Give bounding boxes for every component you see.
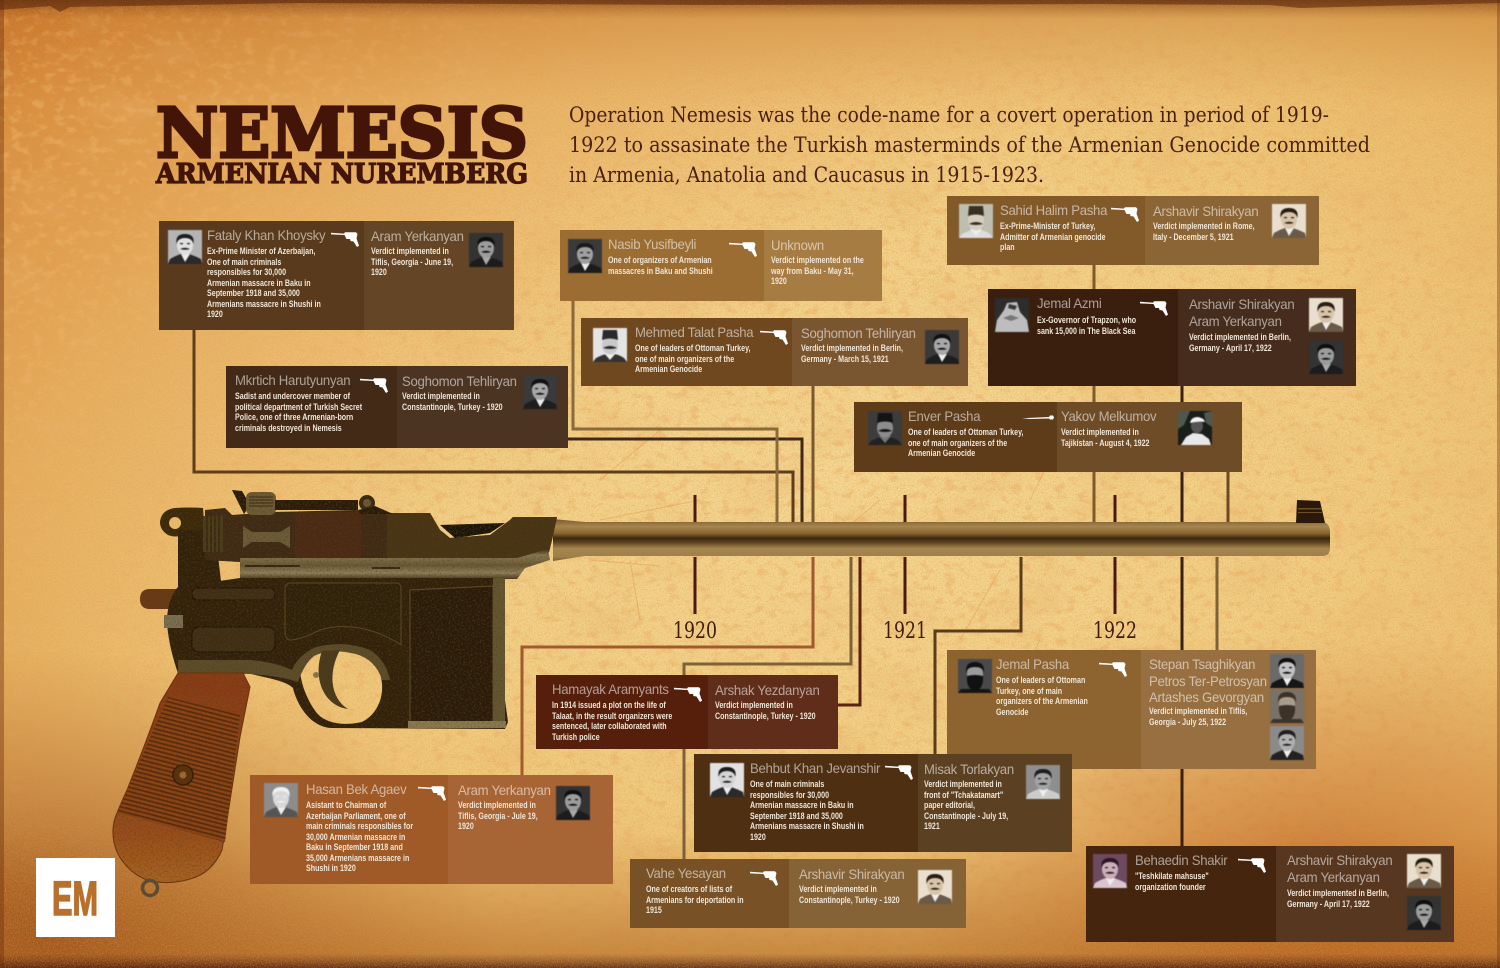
avenger name: Aram Yerkanyan [371,228,464,244]
name: Jemal Azmi [1037,295,1101,311]
description: organization founder [1135,882,1206,892]
verdict: paper editorial, [924,800,975,810]
description: Armenians for deportation in [646,894,744,904]
verdict: Verdict implemented in [1061,427,1139,437]
icon: pistol [1238,858,1266,873]
description: organizers of the Armenian [996,696,1088,706]
icon: pistol [1099,662,1127,677]
icon: pistol [885,765,913,780]
avenger name: Yakov Melkumov [1061,408,1156,424]
icon: pistol [750,871,778,886]
description [646,884,744,916]
portrait: Behaedin Shakir [1093,854,1127,888]
avenger names: Arshavir Shirakyan [1189,296,1294,312]
panel: Mkrtich Harutyunyan / Soghomon Tehliryan [226,366,568,448]
description: 1920 [207,309,223,319]
verdict: Verdict implemented in Berlin, [1189,332,1291,342]
description: Asistant to Chairman of [306,800,386,810]
verdict: Constantinople - July 19, [924,810,1008,820]
portrait: Petros Ter-Petrosyan [1270,689,1304,723]
verdict [1189,332,1291,353]
description: Talaat, in the result organizers were [552,710,672,720]
panel: Sahid Halim Pasha / Arshavir Shirakyan [947,196,1319,265]
avenger name: Misak Torlakyan [924,761,1014,777]
description [1000,221,1106,252]
description: One of organizers of Armenian [608,255,712,265]
description: Police, one of three Armenian-born [235,412,353,422]
verdict [715,700,816,721]
name: Mehmed Talat Pasha [635,324,753,340]
portrait: Soghomon Tehliryan [924,330,960,365]
panel: Behbut Khan Jevanshir / Misak Torlakyan [694,754,1072,852]
pistol body [113,490,557,896]
portrait: Stepan Tsaghikyan [1270,654,1304,688]
avenger name: Unknown [771,237,824,253]
panel: Enver Pasha / Yakov Melkumov [854,402,1242,472]
avenger names [1189,296,1294,329]
panel: Jemal Azmi / Arshavir Shirakyan and Aram Yerkanyan [988,289,1356,386]
panel: Hasan Bek Agaev / Aram Yerkanyan [250,775,613,884]
description [750,779,864,842]
portrait: Jemal Azmi [994,298,1030,333]
verdict [771,255,864,286]
verdict: Tajikistan - August 4, 1922 [1061,438,1150,448]
description: Ex-Prime Minister of Azerbaijan, [207,246,315,256]
verdict: Verdict implemented in [799,884,877,894]
panel: Hamayak Aramyants / Arshak Yezdanyan [536,675,838,749]
year labels: 1921 [883,619,927,644]
name: Mkrtich Harutyunyan [235,372,350,388]
description: plan [1000,242,1015,252]
panel: Fataly Khan Khoysky / Aram Yerkanyan [159,221,514,330]
verdict [1153,221,1255,242]
portrait: Behbut Khan Jevanshir [710,763,744,797]
description: Armenian massacre in Baku in [750,800,854,810]
description: Baku in September 1918 and [306,842,403,852]
name: Hasan Bek Agaev [306,781,406,797]
description: massacres in Baku and Shushi [608,266,713,276]
verdict [402,391,503,412]
verdict: Verdict implemented in [371,246,449,256]
panel: Vahe Yesayan / Arshavir Shirakyan [630,859,966,928]
verdict: Verdict implemented in [458,800,536,810]
verdict [799,884,900,905]
verdict: 1920 [771,276,787,286]
avenger names: Stepan Tsaghikyan [1149,656,1255,672]
description: one of main organizers of the [635,354,734,364]
description: criminals destroyed in Nemesis [235,422,342,432]
portrait: Fataly Khan Khoysky [167,229,203,264]
verdict: Verdict implemented in [924,779,1002,789]
description: 1920 [750,832,766,842]
icon: pistol [1111,207,1139,222]
avenger names: Petros Ter-Petrosyan [1149,672,1267,688]
description: Turkey, one of main [996,686,1062,696]
verdict [1149,706,1247,727]
wooden grip [113,673,250,883]
description: One of creators of lists of [646,884,732,894]
verdict: Germany - March 15, 1921 [801,354,889,364]
avenger name: Arshavir Shirakyan [799,866,904,882]
description: responsibles for 30,000 [750,790,829,800]
portrait: Hasan Bek Agaev [264,783,298,817]
portrait: Yakov Melkumov [1178,410,1212,446]
description: one of main organizers of the [908,438,1007,448]
panel: Nasib Yusifbeyli / Unknown [560,230,882,301]
description [306,800,413,874]
description: One of leaders of Ottoman Turkey, [635,343,751,353]
description: Armenian massacre in Baku in [207,278,311,288]
verdict: Constantinople, Turkey - 1920 [715,710,816,720]
verdict: Tiflis, Georgia - June 19, [371,256,453,266]
name: Behbut Khan Jevanshir [750,760,880,776]
verdict [924,779,1008,832]
avenger name: Arshavir Shirakyan [1153,203,1258,219]
description: Azerbaijan Parliament, one of [306,810,406,820]
icon: pistol [331,232,359,247]
description: main criminals responsibles for [306,821,413,831]
portrait: Aram Yerkanyan [1407,896,1441,930]
panel: Mehmed Talat Pasha / Soghomon Tehliryan [581,318,968,386]
title [155,100,528,190]
avenger name: Aram Yerkanyan [458,782,551,798]
name: Behaedin Shakir [1135,852,1227,868]
verdict: Italy - December 5, 1921 [1153,232,1234,242]
portrait: Aram Yerkanyan [468,232,504,268]
name: Hamayak Aramyants [552,681,669,697]
verdict: Tiflis, Georgia - Jule 19, [458,810,538,820]
description [235,391,362,433]
name: Fataly Khan Khoysky [207,227,325,243]
description: One of main criminals [750,779,824,789]
description [1037,315,1136,336]
verdict [1061,427,1150,448]
icon: pistol [674,687,702,702]
avenger name: Soghomon Tehliryan [801,325,916,341]
avenger names: Aram Yerkanyan [1287,868,1380,884]
year labels: 1920 [673,619,717,644]
description: sentenced, later collaborated with [552,721,667,731]
portrait: Arshavir Shirakyan [1407,854,1441,888]
description: Sadist and undercover member of [235,391,350,401]
description [207,246,321,319]
portrait: Mehmed Talat Pasha [592,327,628,362]
verdict: 1921 [924,821,940,831]
year labels: 1922 [1093,619,1137,644]
verdict [371,246,453,277]
icon: pistol [418,786,446,801]
description: One of leaders of Ottoman Turkey, [908,427,1024,437]
description [908,427,1024,458]
description: In 1914 issued a plot on the life of [552,700,666,710]
verdict: Georgia - July 25, 1922 [1149,716,1226,726]
description: Shushi in 1920 [306,863,356,873]
verdict [1287,888,1389,909]
description: Ex-Governor of Trapzon, who [1037,315,1136,325]
description: September 1918 and 35,000 [207,288,300,298]
verdict [801,343,903,364]
portrait: Soghomon Tehliryan [522,375,558,410]
avenger names: Arshavir Shirakyan [1287,852,1392,868]
description: sank 15,000 in The Black Sea [1037,326,1135,336]
portrait: Arshavir Shirakyan [918,870,952,904]
portrait: Misak Torlakyan [1026,765,1060,799]
avenger names [1149,656,1267,706]
portrait: Sahid Halim Pasha [958,203,994,239]
verdict: front of "Tchakatamart" [924,790,1003,800]
verdict: Verdict implemented in Berlin, [801,343,903,353]
avenger name: Soghomon Tehliryan [402,373,517,389]
description: Ex-Prime-Minister of Turkey, [1000,221,1095,231]
intro paragraph [569,103,1370,187]
description [552,700,672,742]
icon: pistol [1140,301,1168,316]
icon: pistol [760,330,788,345]
description: Admitter of Armenian genocide [1000,232,1106,242]
verdict: 1920 [371,267,387,277]
description [996,675,1088,717]
logo: EM [36,858,115,937]
avenger names: Artashes Gevorgyan [1149,689,1264,705]
verdict: Constantinople, Turkey - 1920 [402,402,503,412]
portrait: Nasib Yusifbeyli [568,238,603,274]
verdict: Verdict implemented in Berlin, [1287,888,1389,898]
name: Sahid Halim Pasha [1000,202,1107,218]
verdict: Verdict implemented in [402,391,480,401]
portrait: Aram Yerkanyan [556,786,590,820]
description [635,343,751,374]
description: "Teshkilate mahsuse" [1135,871,1209,881]
name: Jemal Pasha [996,656,1069,672]
panel: Jemal Pasha / Stepan Tsaghikyan, Petros Ter-Petrosyan, Artashes Gevorgyan [947,650,1316,769]
portrait: Arshavir Shirakyan [1308,297,1344,332]
verdict: way from Baku - May 31, [771,266,854,276]
verdict: Verdict implemented in Tiflis, [1149,706,1247,716]
name: Vahe Yesayan [646,865,726,881]
intro paragraph: in Armenia, Anatolia and Caucasus in 1915-1923. [569,163,1044,187]
description: Armenian Genocide [908,448,975,458]
verdict: 1920 [458,821,474,831]
verdict: Constantinople, Turkey - 1920 [799,894,900,904]
description: 30,000 Armenian massacre in [306,832,405,842]
description: Armenians massacre in Shushi in [750,821,864,831]
verdict: Verdict implemented in Rome, [1153,221,1255,231]
description: Armenian Genocide [635,364,702,374]
year labels [673,619,1137,644]
avenger name: Arshak Yezdanyan [715,682,820,698]
description: Genocide [996,706,1028,716]
description: September 1918 and 35,000 [750,810,843,820]
verdict: Germany - April 17, 1922 [1189,342,1272,352]
description: One of main criminals [207,256,281,266]
description [608,255,713,276]
pistol illustration forming the timeline [112,490,1330,898]
description: responsibles for 30,000 [207,267,286,277]
portrait: Artashes Gevorgyan [1270,726,1304,760]
portrait: Aram Yerkanyan [1308,340,1344,374]
icon: pistol [360,378,388,393]
description: 35,000 Armenians massacre in [306,852,409,862]
description [1135,871,1209,892]
description: 1915 [646,905,662,915]
description: political department of Turkish Secret [235,402,362,412]
portrait: Arshavir Shirakyan [1271,203,1307,238]
verdict: Verdict implemented in [715,700,793,710]
avenger names: Aram Yerkanyan [1189,312,1282,328]
verdict: Germany - April 17, 1922 [1287,898,1370,908]
barrel [553,500,1330,561]
description: Armenians massacre in Shushi in [207,298,321,308]
description: Turkish police [552,732,600,742]
avenger names [1287,852,1392,885]
icon: sword [1022,416,1054,420]
icon: pistol [729,242,757,257]
panel: Behaedin Shakir / Arshavir Shirakyan and Aram Yerkanyan [1086,846,1454,942]
portrait: Jemal Pasha [958,659,992,693]
name: Nasib Yusifbeyli [608,236,696,252]
verdict: Verdict implemented on the [771,255,864,265]
portrait: Enver Pasha [868,410,902,446]
name: Enver Pasha [908,408,980,424]
verdict [458,800,538,832]
description: One of leaders of Ottoman [996,675,1085,685]
